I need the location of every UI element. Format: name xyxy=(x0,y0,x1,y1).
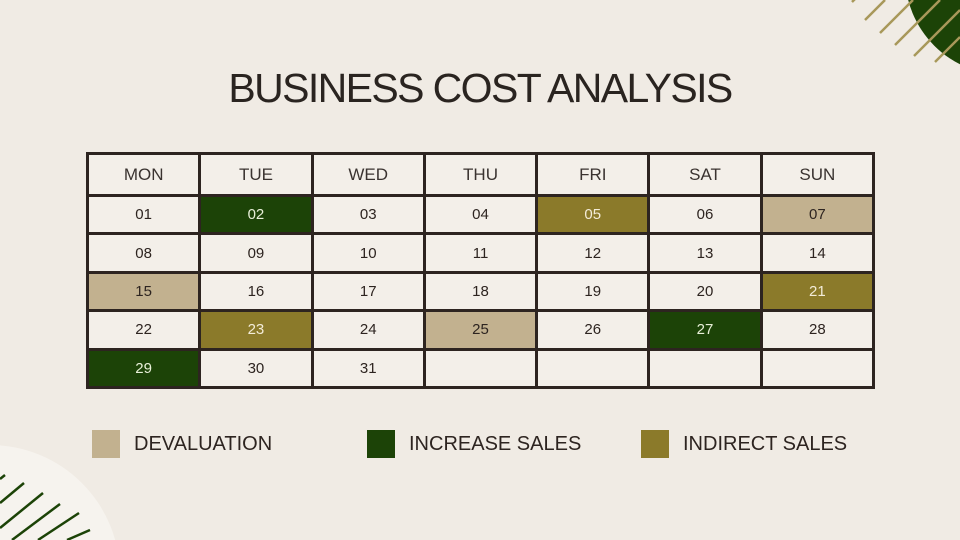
calendar table: 23 xyxy=(248,321,264,338)
calendar table: 26 xyxy=(584,321,601,338)
calendar table: 22 xyxy=(135,321,152,338)
calendar table: MON xyxy=(124,164,163,184)
calendar table: 27 xyxy=(697,321,713,338)
calendar table: 02 xyxy=(248,206,264,223)
calendar table: SUN xyxy=(799,164,835,184)
legend: indirect sales: INDIRECT SALES xyxy=(683,432,847,454)
calendar table: 07 xyxy=(809,206,826,223)
calendar table: 30 xyxy=(248,360,264,377)
legend: increase sales: INCREASE SALES xyxy=(409,432,581,454)
calendar table: 20 xyxy=(697,283,713,300)
calendar table: 28 xyxy=(809,321,826,338)
legend: increase sales xyxy=(367,430,581,458)
calendar table: WED xyxy=(348,164,388,184)
calendar table: 18 xyxy=(472,283,489,300)
calendar table: 12 xyxy=(584,245,601,262)
calendar table: 15 xyxy=(135,283,152,300)
calendar table: 04 xyxy=(472,206,489,223)
calendar table: 24 xyxy=(360,321,377,338)
calendar table: 13 xyxy=(697,245,713,262)
calendar table: 31 xyxy=(360,360,377,377)
calendar table: 10 xyxy=(360,245,377,262)
legend: devaluation: DEVALUATION xyxy=(134,432,272,454)
calendar table: SAT xyxy=(689,164,721,184)
legend: indirect sales xyxy=(641,430,847,458)
legend: devaluation xyxy=(92,430,272,458)
title: BUSINESS COST ANALYSIS xyxy=(228,65,732,111)
calendar table: 21 xyxy=(809,283,826,300)
calendar table: 01 xyxy=(135,206,152,223)
calendar table: 03 xyxy=(360,206,377,223)
calendar table: 09 xyxy=(248,245,264,262)
calendar table: 06 xyxy=(697,206,713,223)
calendar table: 11 xyxy=(473,245,488,262)
calendar table xyxy=(86,152,875,389)
calendar table: 17 xyxy=(360,283,377,300)
calendar table: TUE xyxy=(239,164,273,184)
calendar table: 08 xyxy=(135,245,152,262)
calendar table: 14 xyxy=(809,245,826,262)
calendar table: 05 xyxy=(584,206,601,223)
calendar table: FRI xyxy=(579,164,606,184)
calendar table: 29 xyxy=(135,360,152,377)
calendar table: THU xyxy=(463,164,498,184)
calendar table: 19 xyxy=(584,283,601,300)
calendar table: 25 xyxy=(472,321,489,338)
calendar table: 16 xyxy=(248,283,264,300)
